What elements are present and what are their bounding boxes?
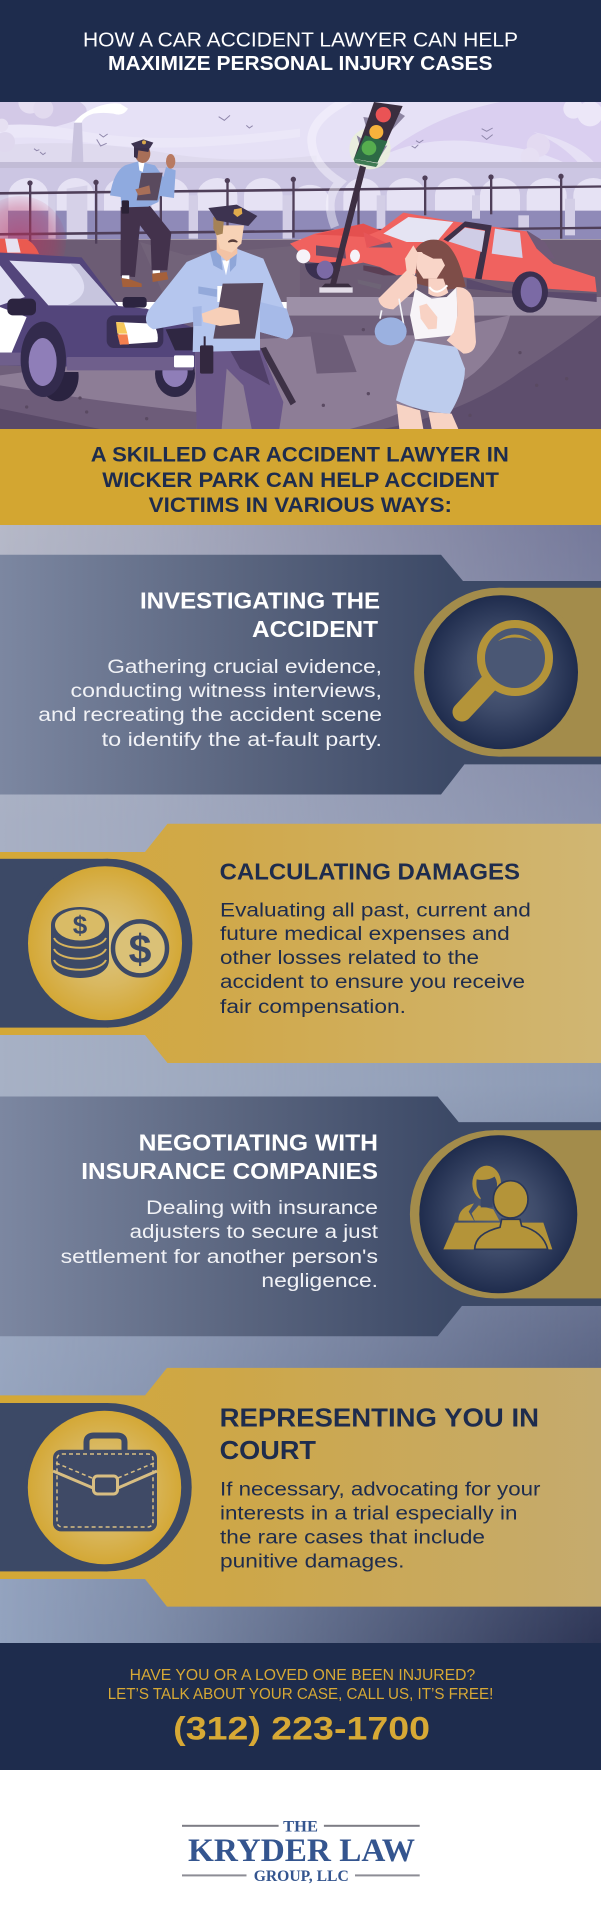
heading: investigating the accident: INVESTIGATING THE xyxy=(140,588,380,614)
panel: negotiating with insurance companies xyxy=(0,1096,601,1336)
body text: punitive damages. xyxy=(220,1552,404,1573)
body text: adjusters to secure a just xyxy=(130,1222,379,1243)
body text: Gathering crucial evidence, xyxy=(107,657,382,678)
subtitle line 2: WICKER PARK CAN HELP ACCIDENT xyxy=(102,468,499,492)
body text xyxy=(220,1479,541,1573)
woman holding her head xyxy=(375,240,476,429)
title line 1: HOW A CAR ACCIDENT LAWYER CAN HELP xyxy=(83,28,518,52)
sidewalk and road xyxy=(0,239,601,429)
title line 2: MAXIMIZE PERSONAL INJURY CASES xyxy=(108,52,492,75)
body text: accident to ensure you receive xyxy=(220,972,525,993)
body text: conducting witness interviews, xyxy=(70,681,382,702)
logo: The Kryder Law Group, LLC: GROUP, LLC xyxy=(254,1868,349,1885)
foreground police officer xyxy=(146,205,296,429)
smoke from crash xyxy=(312,99,350,227)
call to action text xyxy=(108,1667,493,1703)
body text: fair compensation. xyxy=(220,997,406,1018)
illustration: police at car accident scene xyxy=(0,90,601,429)
logo: The Kryder Law Group, LLC xyxy=(182,1819,420,1885)
icon: two people at a desk xyxy=(443,1166,552,1249)
body text: settlement for another person's xyxy=(61,1247,378,1268)
birds xyxy=(34,115,493,155)
bridge with arches xyxy=(0,162,601,239)
body text xyxy=(220,900,531,1018)
panel: representing you in court xyxy=(0,1368,601,1607)
panel: investigating the accident xyxy=(0,555,601,794)
red crashed car xyxy=(290,213,597,313)
steps background gradient xyxy=(0,525,601,1643)
call to action text: LET’S TALK ABOUT YOUR CASE, CALL US, IT’S FREE! xyxy=(108,1686,493,1703)
body text: If necessary, advocating for your xyxy=(220,1479,541,1500)
body text: Evaluating all past, current and xyxy=(220,900,531,921)
police car in foreground xyxy=(0,196,195,401)
logo: The Kryder Law Group, LLC: THE xyxy=(283,1819,318,1836)
subtitle line 1: A SKILLED CAR ACCIDENT LAWYER IN xyxy=(91,442,509,466)
body text xyxy=(61,1198,379,1292)
body text: future medical expenses and xyxy=(220,924,510,945)
heading: representing you in court xyxy=(220,1402,539,1465)
heading band xyxy=(0,429,601,525)
logo: The Kryder Law Group, LLC: KRYDER LAW xyxy=(188,1833,415,1869)
heading: investigating the accident: ACCIDENT xyxy=(252,616,378,642)
heading: representing you in court: REPRESENTING YOU IN xyxy=(220,1402,539,1432)
heading: calculating damages: CALCULATING DAMAGES xyxy=(220,858,520,884)
police officer in background xyxy=(110,139,176,287)
heading: negotiating with insurance companies xyxy=(81,1130,378,1184)
call to action text: HAVE YOU OR A LOVED ONE BEEN INJURED? xyxy=(130,1667,476,1684)
body text: the rare cases that include xyxy=(220,1528,485,1548)
heading: investigating the accident xyxy=(140,588,380,642)
heading: negotiating with insurance companies: NEGOTIATING WITH xyxy=(139,1130,378,1156)
clouds and sky bands xyxy=(0,102,601,162)
heading: negotiating with insurance companies: INSURANCE COMPANIES xyxy=(81,1158,378,1184)
icon: coins: $ xyxy=(73,910,88,940)
fence xyxy=(0,174,601,244)
traffic light xyxy=(319,102,405,293)
panel: calculating damages xyxy=(0,824,601,1063)
body text: to identify the at-fault party. xyxy=(102,730,382,751)
body text xyxy=(38,657,382,751)
icon: magnifying glass xyxy=(462,624,549,712)
body text: other losses related to the xyxy=(220,948,479,969)
body text: and recreating the accident scene xyxy=(38,705,382,726)
phone number: (312) 223-1700 xyxy=(173,1710,430,1746)
icon: coins: $ xyxy=(129,926,152,972)
subtitle line 3: VICTIMS IN VARIOUS WAYS: xyxy=(149,493,452,517)
icon: briefcase xyxy=(53,1436,157,1531)
icon: coins xyxy=(51,907,167,978)
call to action footer xyxy=(0,1643,601,1770)
title banner xyxy=(0,0,601,102)
body text: Dealing with insurance xyxy=(146,1198,378,1219)
factory chimney xyxy=(71,103,128,163)
heading: representing you in court: COURT xyxy=(220,1435,316,1465)
body text: negligence. xyxy=(261,1271,378,1292)
body text: interests in a trial especially in xyxy=(220,1503,517,1524)
